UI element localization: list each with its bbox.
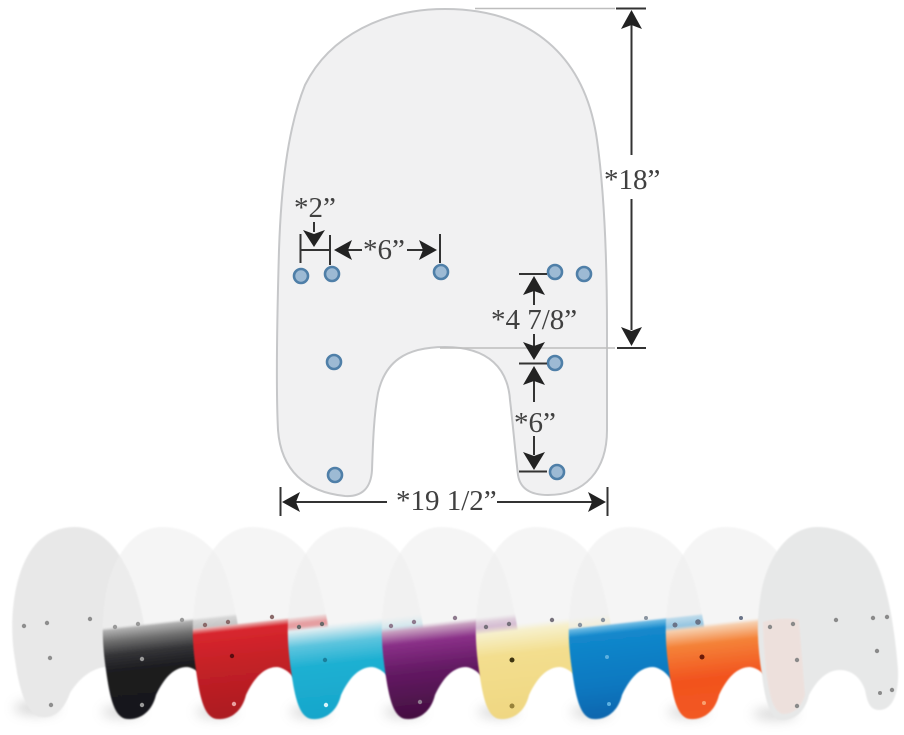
clear shield 2 — [758, 527, 898, 720]
red shield — [193, 527, 333, 719]
dimension: 6 inch lower spacing: *6” — [514, 407, 556, 439]
clear shield 1 — [12, 527, 145, 717]
shadows — [14, 702, 797, 719]
dimension: 19 1/2 inch width — [280, 485, 608, 517]
dimension: 6 inch spacing — [334, 234, 440, 266]
dimension: 6 inch spacing: *6” — [363, 234, 405, 266]
dimension: 18 inch height: *18” — [604, 164, 660, 196]
blue shield — [569, 527, 709, 719]
dimension: 18 inch height — [440, 8, 660, 348]
dimension: 4 7/8 inch spacing — [491, 274, 577, 364]
color options row — [12, 527, 898, 720]
cyan shield — [288, 527, 428, 719]
dimension: 2 inch spacing: *2” — [294, 192, 336, 224]
orange shield — [666, 527, 806, 719]
dimension: 6 inch lower spacing — [514, 366, 556, 472]
dimension: 2 inch spacing — [294, 192, 336, 265]
yellow shield — [476, 527, 616, 719]
dimension: 19 1/2 inch width: *19 1/2” — [396, 485, 497, 517]
black shield — [103, 527, 243, 719]
windshield outline — [277, 9, 607, 496]
diagram: windshield dimensions — [277, 8, 660, 517]
mounting holes — [294, 265, 591, 482]
dimension: 4 7/8 inch spacing: *4 7/8” — [491, 304, 577, 336]
purple shield — [382, 527, 522, 719]
